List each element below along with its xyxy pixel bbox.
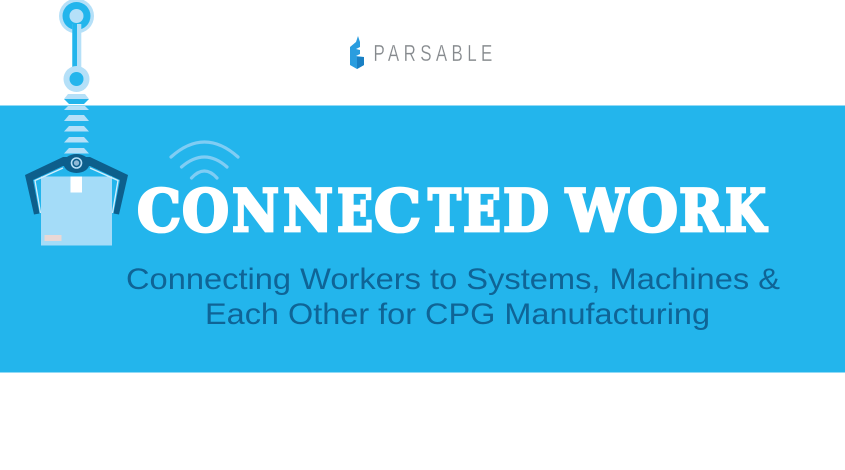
title: C: [374, 177, 421, 245]
title: N: [283, 177, 333, 245]
icon: wifi signal: [171, 142, 238, 178]
title: O: [182, 177, 229, 245]
icon: logo building: [350, 36, 364, 69]
arm lower joint: [64, 66, 90, 92]
subtitle line 2: Each Other for CPG Manufacturing: [205, 298, 710, 331]
arm rod: [72, 24, 81, 68]
subtitle: [126, 263, 780, 331]
title: W: [565, 177, 629, 245]
cardboard box: [41, 176, 112, 246]
blue banner panel: [0, 106, 845, 372]
title: D: [503, 177, 549, 245]
arm spring segments: [64, 94, 89, 154]
arm top joint: [59, 0, 94, 34]
logo wordmark: PARSABLE: [374, 40, 492, 67]
subtitle line 1: Connecting Workers to Systems, Machines &: [126, 263, 780, 296]
gripper claw: [25, 154, 128, 214]
title: O: [627, 177, 678, 245]
title: C: [137, 177, 181, 245]
title: T: [428, 177, 461, 245]
title: R: [679, 177, 724, 245]
title: N: [232, 177, 279, 245]
logo: Parsable: [350, 36, 492, 69]
title: E: [337, 177, 373, 245]
icon: robotic arm with box: [25, 0, 128, 246]
title: K: [725, 177, 768, 245]
title: E: [463, 177, 501, 245]
